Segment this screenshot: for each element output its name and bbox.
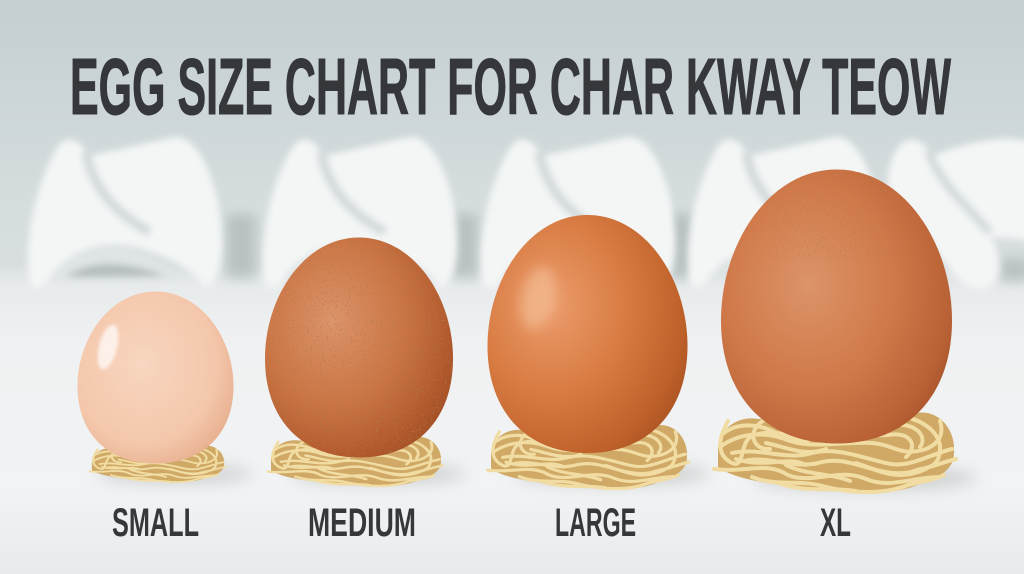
- egg: XL: [721, 170, 952, 444]
- nest: XL: [714, 413, 956, 493]
- column: XL egg: [714, 170, 977, 545]
- egg holders in background: [28, 137, 1024, 288]
- egg: medium: [260, 235, 460, 460]
- column: medium egg: [260, 235, 466, 545]
- nest: small: [90, 445, 225, 482]
- column: small egg: [78, 292, 253, 545]
- egg: large: [488, 215, 688, 453]
- egg: small: [78, 292, 234, 464]
- shadows between holders: [226, 214, 1024, 282]
- label: XL: XL: [820, 501, 851, 545]
- nest: large: [488, 425, 689, 489]
- label: large: LARGE: [555, 501, 636, 545]
- column: large egg: [488, 215, 710, 545]
- label: medium: MEDIUM: [308, 501, 416, 545]
- nest: medium: [268, 437, 442, 486]
- label: small: SMALL: [112, 501, 199, 545]
